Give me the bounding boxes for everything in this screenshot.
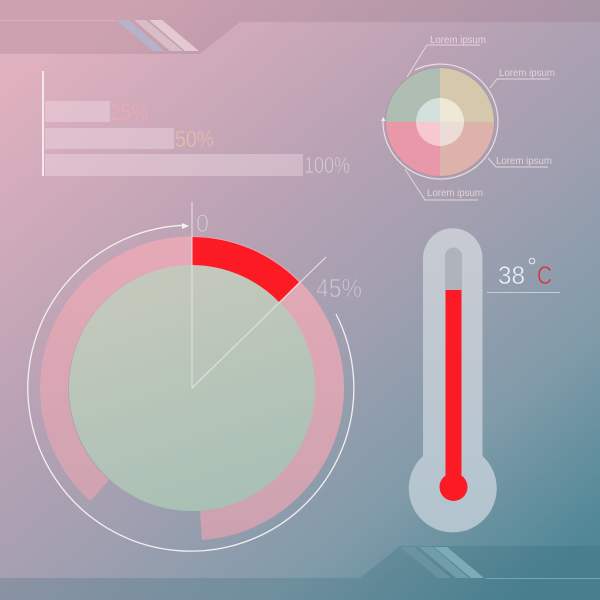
temperature readout: C (537, 262, 552, 290)
thermometer tube (445, 248, 462, 290)
45 degree line (192, 257, 326, 388)
bar chart (42, 71, 350, 178)
inner disc (69, 265, 315, 511)
small pie chart with callouts (381, 35, 555, 200)
callout top: Lorem ipsum (430, 35, 486, 46)
thermometer (409, 228, 560, 532)
zero axis line (191, 202, 193, 388)
callout right top (490, 68, 555, 88)
callout bottom: Lorem ipsum (427, 188, 483, 199)
pie outer arc with arrow (381, 64, 498, 179)
bar 25% (45, 99, 148, 125)
bar 50%: 50% (175, 126, 214, 152)
mercury (440, 290, 468, 501)
thermometer body (409, 228, 497, 532)
pie shadow ring (385, 67, 495, 177)
callout right top: Lorem ipsum (499, 68, 555, 79)
callout top (407, 35, 486, 77)
callout right bottom: Lorem ipsum (496, 156, 552, 167)
bar 50% (45, 126, 214, 152)
outer ring pink (40, 236, 344, 540)
temperature readout (487, 258, 560, 293)
pie quadrants (386, 68, 494, 176)
large donut gauge (28, 202, 362, 551)
bar 25%: 25% (110, 99, 148, 125)
label 45%: 45% (316, 273, 362, 303)
pie centre (416, 98, 464, 146)
bar 100%: 100% (304, 152, 350, 178)
label 0: 0 (196, 210, 209, 238)
outer white arc with arrow (28, 223, 354, 551)
callout bottom (405, 169, 483, 200)
header band (0, 0, 600, 54)
red 45 percent segment (192, 237, 299, 302)
bar 100% (45, 152, 350, 178)
footer band (0, 546, 600, 600)
temperature readout: 38 (498, 262, 525, 290)
